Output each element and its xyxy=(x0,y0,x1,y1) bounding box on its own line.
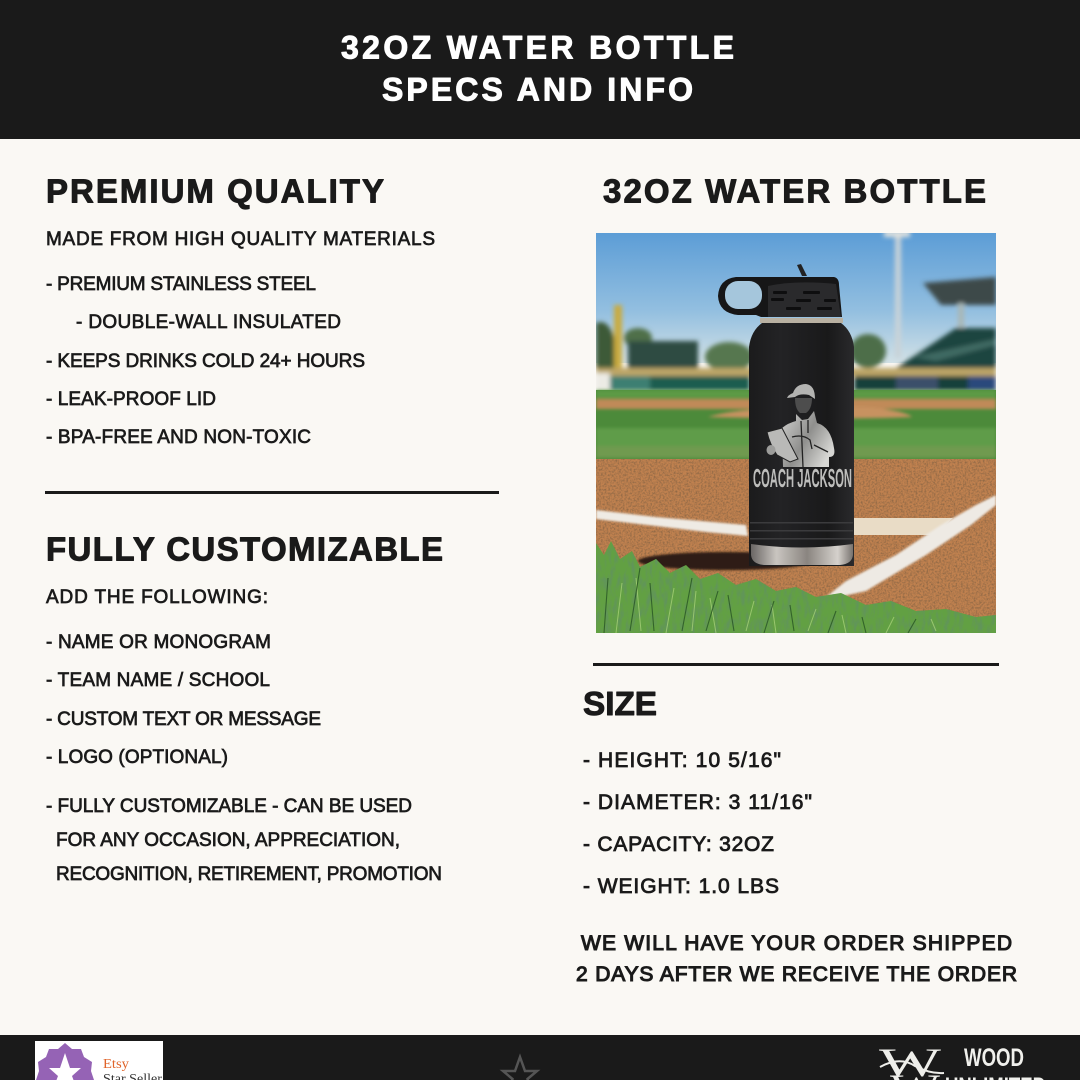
face xyxy=(795,398,812,413)
icon: white star xyxy=(49,1053,81,1080)
list: quality features: - LEAK-PROOF LID xyxy=(46,389,216,410)
callout: shipping: WE WILL HAVE YOUR ORDER SHIPPED xyxy=(581,932,1012,955)
list: dimensions: - DIAMETER: 3 11/16" xyxy=(583,791,812,814)
bottle rings xyxy=(750,522,853,540)
list: customization options: - LOGO (OPTIONAL) xyxy=(46,747,228,768)
heading: size: SIZE xyxy=(583,685,657,722)
title xyxy=(341,30,734,108)
list: quality features xyxy=(46,274,365,448)
text: intro: MADE FROM HIGH QUALITY MATERIALS xyxy=(46,229,435,250)
callout: shipping: 2 DAYS AFTER WE RECEIVE THE ORDER xyxy=(576,963,1017,986)
list: quality features: - KEEPS DRINKS COLD 24+ HOURS xyxy=(46,351,365,372)
list: customization options xyxy=(46,632,321,768)
icon: center star outline xyxy=(503,1057,537,1080)
logo: wood unlimited: WOOD xyxy=(964,1044,1024,1072)
text: add the following: ADD THE FOLLOWING: xyxy=(46,587,268,608)
list: customization options: - TEAM NAME / SCHOOL xyxy=(46,670,270,691)
bottle steel base xyxy=(751,544,853,565)
clipboard xyxy=(767,428,798,462)
badge: etsy star seller xyxy=(35,1041,163,1080)
list: dimensions xyxy=(583,749,812,898)
list: quality features: - BPA-FREE AND NON-TOXIC xyxy=(46,427,311,448)
header band xyxy=(0,0,1080,139)
text: occasions note xyxy=(46,796,442,885)
heading: fully customizable: FULLY CUSTOMIZABLE xyxy=(46,530,443,568)
cap xyxy=(787,384,815,399)
grass foreground xyxy=(596,533,996,633)
list: dimensions: - HEIGHT: 10 5/16" xyxy=(583,749,781,772)
title: 32OZ WATER BOTTLE xyxy=(341,30,734,66)
icon: purple badge xyxy=(36,1043,94,1080)
bottle lid xyxy=(718,264,842,317)
heading: premium quality: PREMIUM QUALITY xyxy=(46,172,384,210)
text: occasions note: - FULLY CUSTOMIZABLE - CAN BE USED xyxy=(46,796,412,817)
product photo: COACH JACKSON xyxy=(753,463,852,493)
badge: etsy star seller: Etsy xyxy=(103,1057,129,1072)
jacket xyxy=(782,411,834,467)
logo: wood unlimited xyxy=(879,1048,1044,1080)
text: occasions note: FOR ANY OCCASION, APPRECIATION, xyxy=(56,830,400,851)
engraving: coach xyxy=(766,384,834,467)
title: SPECS AND INFO xyxy=(382,72,693,108)
footer band xyxy=(0,1035,1080,1080)
heading: product name: 32OZ WATER BOTTLE xyxy=(603,172,986,210)
list: dimensions: - WEIGHT: 1.0 LBS xyxy=(583,875,779,898)
text: occasions note: RECOGNITION, RETIREMENT, PROMOTION xyxy=(56,864,442,885)
list: customization options: - CUSTOM TEXT OR MESSAGE xyxy=(46,709,321,730)
water bottle xyxy=(718,264,854,566)
list: quality features: - DOUBLE-WALL INSULATED xyxy=(76,312,341,333)
callout: shipping xyxy=(576,932,1017,986)
product photo xyxy=(596,231,996,633)
panel: fully customizable xyxy=(46,530,443,885)
list: quality features: - PREMIUM STAINLESS STEEL xyxy=(46,274,316,295)
panel: size xyxy=(583,685,812,898)
panel: premium quality xyxy=(46,172,435,448)
bottle body xyxy=(749,323,854,566)
list: customization options: - NAME OR MONOGRAM xyxy=(46,632,271,653)
list: dimensions: - CAPACITY: 32OZ xyxy=(583,833,774,856)
